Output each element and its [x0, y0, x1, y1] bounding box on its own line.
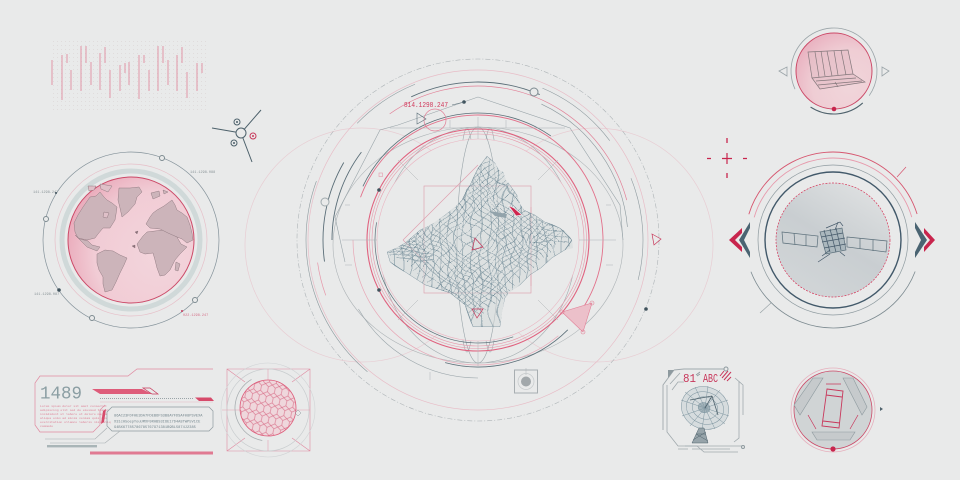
paragraph: aliqua enim ad minim veniam quis nos: [40, 416, 107, 420]
hex data box: [107, 407, 213, 431]
panel: radio antenna: ABC: [703, 372, 718, 386]
disc: [776, 183, 890, 297]
triangles: [417, 113, 426, 124]
panel: data readout 1489: X31c05oepYouUMXF9R0BS3I6E17D4A8TWP5V1CE: [114, 420, 201, 424]
satellite drawing: [782, 222, 887, 262]
label: coordinate: 814.1298.247: [404, 102, 448, 110]
icon: tri-node target: [212, 110, 261, 162]
coordinates: 141.1298.247: [33, 191, 58, 195]
panel: satellite: [719, 126, 947, 354]
coordinates: [33, 171, 215, 318]
panel: radio antenna: [663, 367, 744, 452]
guide polygon lines: [335, 97, 623, 262]
nodes: [44, 156, 198, 320]
panel: central radar rings: [236, 0, 720, 480]
bar chart: top-left signal bars: [50, 40, 206, 110]
globe disc: [68, 177, 194, 303]
laptop: [808, 50, 865, 89]
panel: hex sphere: [221, 363, 315, 457]
dish: [675, 380, 735, 443]
panel: data readout 1489: G4BX67785786785767971381B9BL5874J2385: [114, 426, 196, 430]
paragraph: exercitation ullamco laboris nisi aliq: [40, 420, 111, 424]
continents: [74, 184, 193, 292]
coordinates: 141.1298.087: [34, 293, 59, 297]
icon: small target square: [514, 370, 538, 393]
phone: [822, 389, 843, 428]
target square: [424, 186, 531, 293]
icon: phone badge: [791, 368, 883, 452]
paragraph: adipiscing elit sed do eiusmod tempor: [40, 408, 109, 412]
icon: laptop badge: [773, 10, 895, 132]
panel: data readout 1489: 86AC23FDF0E3DA7FDEB6FS3B8AYFDSAF08P5VEXA: [114, 414, 203, 418]
chart: wireframe mountain: [387, 156, 573, 327]
icon: crosshair: [707, 138, 747, 178]
panel: data readout 1489: [35, 369, 214, 454]
paragraph: incididunt ut labore et dolore magna: [40, 412, 107, 416]
sphere: [240, 380, 296, 436]
panel: world globe: [33, 152, 219, 328]
inner clear disc: [377, 139, 579, 341]
coordinates: 141.1298.088: [190, 171, 215, 175]
paragraph: [40, 404, 111, 428]
crosshair ticks: [342, 117, 616, 380]
chevrons: [739, 222, 750, 258]
mountain highlights: [472, 205, 522, 318]
number: 1489: [40, 384, 82, 404]
marker nodes: [321, 88, 648, 311]
coordinates: 022.1298.247: [183, 314, 208, 318]
label: 81: [683, 372, 696, 386]
paragraph: Lorem ipsum dolor sit amet consectet: [40, 404, 107, 408]
paragraph: commodo: [40, 424, 53, 428]
